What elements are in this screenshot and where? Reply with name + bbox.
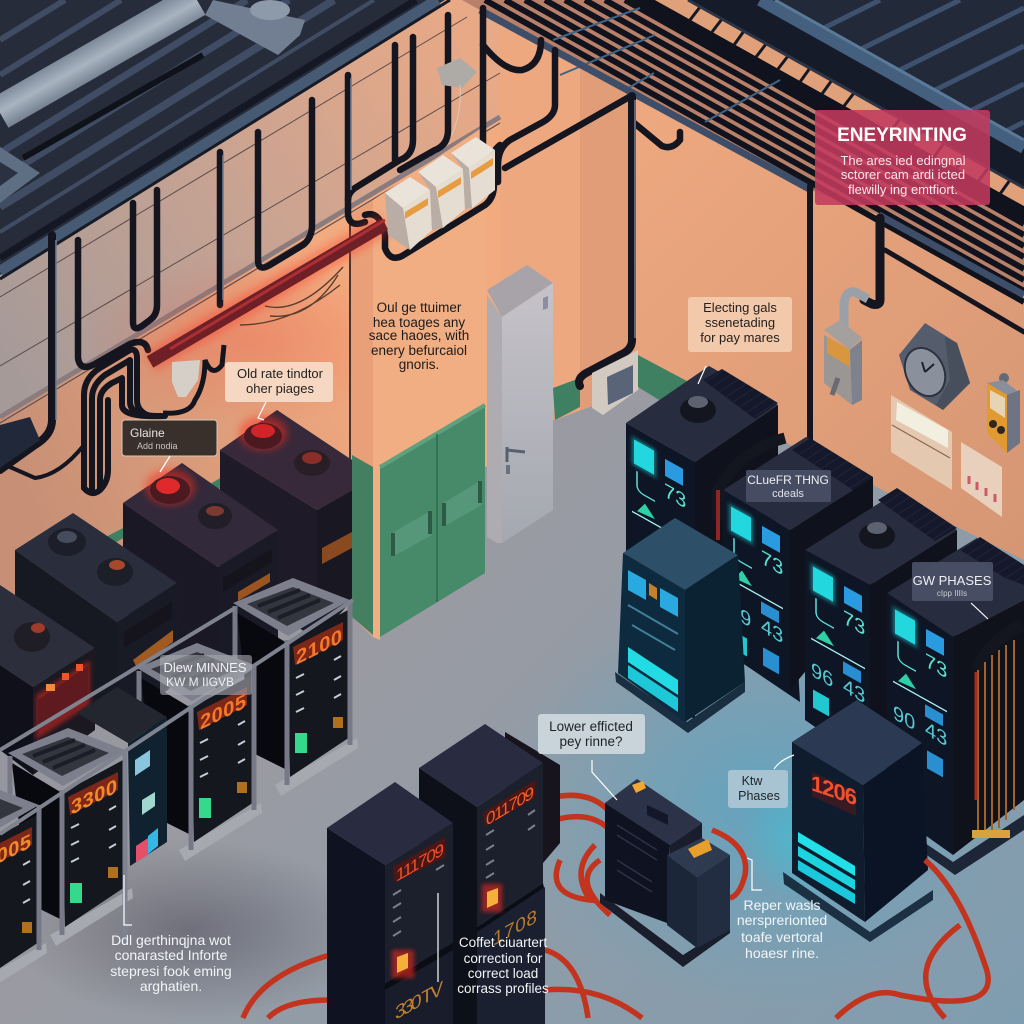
callout: dark tag: Add nodia <box>137 441 178 451</box>
callout: old rate: oher piages <box>246 381 314 396</box>
wall meter orange <box>987 373 1020 453</box>
wall junction box <box>592 350 638 415</box>
callout: lower efficted: pey rinne? <box>559 734 623 749</box>
column note: hea toages any <box>373 315 465 330</box>
wall notices <box>891 395 1002 517</box>
bottom stack cabinet 1: 330 TV <box>395 978 443 1024</box>
column note: sace haoes, with <box>369 328 469 343</box>
cage rack 2 <box>137 643 262 861</box>
cage rack 3: 3300 <box>71 775 117 820</box>
note: coffet: correct load <box>468 966 538 981</box>
top-right title panel <box>815 110 990 205</box>
blue server cabinet R1 <box>626 366 778 720</box>
note: coffet <box>438 893 549 996</box>
wall clock <box>897 323 970 410</box>
callout: dark tag: Glaine <box>130 426 165 440</box>
callout: old rate: Old rate tindtor <box>237 366 324 381</box>
wall gauge with pipe <box>824 292 868 405</box>
metal cabinet door <box>487 265 553 543</box>
callout: lower efficted: Lower efficted <box>549 719 633 734</box>
callout: lower efficted <box>538 714 645 800</box>
callout: electing: for pay mares <box>700 330 780 345</box>
note: old gathering: Ddl gerthinqjna wot <box>111 932 231 948</box>
callout: electing: Electing gals <box>703 300 777 315</box>
callout: GW phases: cIpp IIIIs <box>937 589 967 598</box>
callout: ktw phases: Phases <box>738 789 780 803</box>
note: old gathering: stepresi fook eming <box>110 963 232 979</box>
bottom stack cabinet 2: 1708 <box>493 906 537 951</box>
callout: new minnes: KW M IIGVB <box>166 675 234 689</box>
blue control unit <box>77 687 167 866</box>
note: reper <box>737 858 827 961</box>
top-right title panel: ENEYRINTING <box>837 125 967 146</box>
cyan cabinet R5 <box>615 518 745 733</box>
note: old gathering <box>110 875 232 994</box>
cyan cabinet R6 with display: 1206 <box>811 771 857 811</box>
top-right title panel: sctorer cam ardi icted <box>841 167 965 182</box>
cabinet C <box>15 513 180 730</box>
wall: back and right <box>480 0 1024 560</box>
column note: enery befurcaiol <box>371 343 467 358</box>
note: coffet: correction for <box>464 951 543 966</box>
central power unit <box>600 779 730 967</box>
note: old gathering: conarasted Inforte <box>115 947 228 963</box>
callout: electing <box>688 297 792 384</box>
note: old gathering: arghatien. <box>140 978 202 994</box>
cyan cabinet R6 with display <box>740 700 933 942</box>
note: reper: toafe vertoral <box>741 929 823 945</box>
note: reper: nersprerionted <box>737 912 827 928</box>
note: reper: hoaesr rine. <box>745 945 819 961</box>
conduit highlights <box>56 78 635 420</box>
callout: old rate <box>225 362 333 420</box>
cabinet A <box>220 410 352 640</box>
cage rack 2: 2005 <box>200 690 246 735</box>
blue server cabinet R4 with wiring: 43 <box>925 717 947 751</box>
ceiling: right cable rack and tiles <box>462 0 1024 302</box>
blue server cabinet R3: 43 <box>843 674 865 708</box>
bottom stack cabinet 1: 111709 <box>396 838 444 886</box>
ceiling: left beams with main pipe <box>0 0 450 279</box>
bottom stack cabinet 2 <box>419 724 560 1024</box>
callout: ktw phases <box>728 755 794 808</box>
column note: gnoris. <box>399 357 439 372</box>
blue server cabinet R1: 73 <box>664 479 686 513</box>
note: coffet: Coffet ciuartert <box>459 935 547 950</box>
red server cabinet row <box>0 410 352 775</box>
wall: left with upper band <box>0 0 500 700</box>
cage rack 4 <box>0 783 47 1001</box>
column note <box>369 300 469 372</box>
callout: cluster <box>746 470 831 502</box>
callout: cluster: cdeals <box>772 488 804 500</box>
callout: GW phases: GW PHASES <box>913 573 992 588</box>
top-right title panel: The ares ied edingnal <box>840 153 966 168</box>
callout: ktw phases: Ktw <box>742 774 763 788</box>
red floor cables <box>243 795 988 1018</box>
note: coffet: corrass profiles <box>457 981 549 996</box>
blue server cabinet R4 with wiring <box>873 537 1024 875</box>
callout: cluster: CLueFR THNG <box>747 473 829 487</box>
note: reper: Reper wasls <box>743 897 821 913</box>
column note: Oul ge ttuimer <box>377 300 462 315</box>
blue server cabinet R4 with wiring: 73 <box>925 649 947 683</box>
callout: new minnes <box>160 655 252 695</box>
callout: new minnes: Dlew MINNES <box>163 660 247 675</box>
callout: GW phases <box>912 562 993 619</box>
blue server cabinet R2: 89 <box>729 598 751 632</box>
cable tray with red glow <box>0 220 385 468</box>
electrical boxes on column <box>385 58 495 250</box>
bottom stack cabinet 2: 011709 <box>486 782 534 830</box>
top-right title panel: flewilly ing emtfiort. <box>848 182 958 197</box>
blue server cabinet R3: 96 <box>811 658 833 692</box>
column with green door <box>350 125 486 640</box>
cage rack 1 <box>233 578 358 796</box>
blue server cabinet R2: 43 <box>761 614 783 648</box>
black conduit pipes on left wall <box>0 8 1024 493</box>
cage rack 1: 2100 <box>296 625 342 670</box>
blue server cabinet R3: 73 <box>843 606 865 640</box>
bottom stack cabinet 1 <box>327 782 453 1024</box>
blue server cabinet R2 <box>718 437 873 702</box>
cabinet B <box>123 463 278 690</box>
cage rack 3 <box>8 728 133 946</box>
cabinet D <box>0 585 95 775</box>
rack rails <box>0 600 353 945</box>
blue server cabinet R4 with wiring: 90 <box>893 701 915 735</box>
blue server cabinet R3 <box>805 488 957 765</box>
callout: electing: ssenetading <box>705 315 775 330</box>
blue server cabinet R2: 73 <box>761 546 783 580</box>
callout: dark tag <box>122 420 217 472</box>
